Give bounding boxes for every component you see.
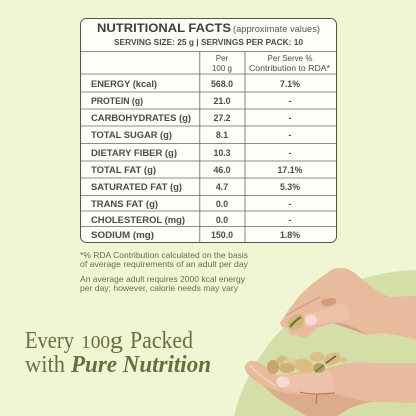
green arc backdrop xyxy=(234,270,416,416)
nutrient rows: 0.0 xyxy=(216,215,228,225)
icon: upper hand pinching a pistachio xyxy=(280,268,416,339)
column headers: Contribution to RDA* xyxy=(249,64,330,73)
nutrient rows: 5.3% xyxy=(280,182,300,192)
pistachios in palm xyxy=(267,350,347,376)
heading: Every xyxy=(25,328,74,354)
table title xyxy=(97,21,320,47)
heading xyxy=(25,328,211,378)
footnotes xyxy=(80,250,249,293)
nutrient rows: 4.7 xyxy=(216,182,228,192)
pistachio held in fingers xyxy=(285,311,307,333)
nutrient rows: TOTAL SUGAR (g) xyxy=(91,130,172,140)
nutrient rows: SODIUM (mg) xyxy=(91,230,154,240)
icon: lower hand with pistachios xyxy=(245,350,416,416)
column headers: Per Serve % xyxy=(268,54,312,63)
table title: (approximate values) xyxy=(233,24,320,34)
nutrient rows: - xyxy=(289,130,292,140)
heading: Pure Nutrition xyxy=(70,352,211,378)
nutrient rows: 150.0 xyxy=(211,230,233,240)
nutrient rows: 27.2 xyxy=(213,113,231,123)
nutrient rows: - xyxy=(289,148,292,158)
column headers xyxy=(212,54,330,73)
nutrient rows: - xyxy=(289,215,292,225)
footnotes: of average requirements of an adult per day xyxy=(80,259,249,269)
nutrient rows: TRANS FAT (g) xyxy=(91,199,158,209)
nutrient rows: TOTAL FAT (g) xyxy=(91,165,156,175)
nutrient rows: 17.1% xyxy=(278,165,303,175)
nutrient rows: SATURATED FAT (g) xyxy=(91,182,182,192)
thumb nail xyxy=(276,376,290,388)
nutrient rows: PROTEIN (g) xyxy=(91,96,143,106)
nutrient rows: 8.1 xyxy=(216,130,228,140)
nutrient rows: CHOLESTEROL (mg) xyxy=(91,215,185,225)
nutrient rows: 0.0 xyxy=(216,199,228,209)
thumb nail xyxy=(305,314,317,326)
table title: NUTRITIONAL FACTS xyxy=(97,21,231,35)
nutrient rows: - xyxy=(289,199,292,209)
nutrient rows: CARBOHYDRATES (g) xyxy=(91,113,191,123)
column headers: 100 g xyxy=(212,64,232,73)
nutrient rows: - xyxy=(289,113,292,123)
nutrient rows: 10.3 xyxy=(213,148,231,158)
nutrient rows: 46.0 xyxy=(213,165,231,175)
nutrient rows: ENERGY (kcal) xyxy=(91,79,157,89)
nutrient rows: 21.0 xyxy=(213,96,231,106)
nutrient rows: - xyxy=(289,96,292,106)
table title: SERVING SIZE: 25 g | SERVINGS PER PACK: 10 xyxy=(114,38,304,47)
nutrient rows: 7.1% xyxy=(280,79,300,89)
footnotes: per day; however, calorie needs may vary xyxy=(80,283,239,293)
nutrient rows: 568.0 xyxy=(211,79,233,89)
nutrient rows: DIETARY FIBER (g) xyxy=(91,148,177,158)
footnotes: *% RDA Contribution calculated on the basis xyxy=(80,250,248,260)
heading: Packed xyxy=(130,328,193,354)
column headers: Per xyxy=(216,54,229,63)
nutrient rows: 1.8% xyxy=(280,230,300,240)
heading: with xyxy=(25,352,65,378)
panel: nutrition table xyxy=(80,18,336,242)
footnotes: An average adult requires 2000 kcal energy xyxy=(80,274,246,284)
heading: 100g xyxy=(81,328,123,354)
nutrient rows xyxy=(91,79,303,240)
